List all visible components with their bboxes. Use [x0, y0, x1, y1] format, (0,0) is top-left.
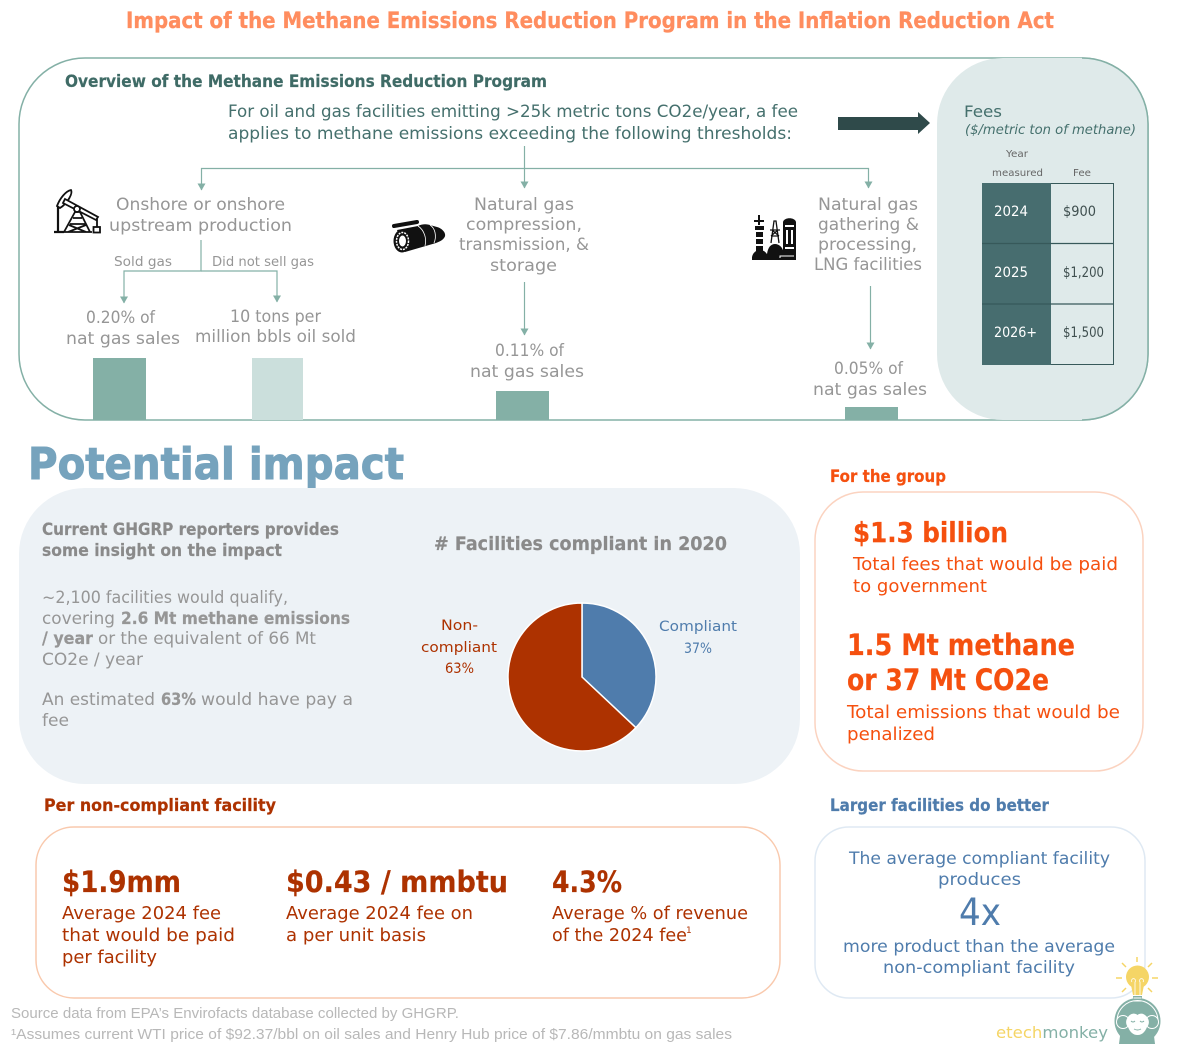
branch: onshore production: Onshore or onshore: [116, 195, 285, 215]
branch: gathering and LNG: Natural gas: [818, 195, 918, 215]
insight body text: covering: [42, 609, 115, 629]
icon: refinery: [752, 215, 796, 260]
fee table: Year: [1005, 149, 1029, 160]
stat: total emissions: 1.5 Mt methane: [847, 628, 1075, 662]
fee table: $1,200: [1063, 265, 1104, 281]
insight heading: some insight on the impact: [42, 541, 282, 560]
overview description: [228, 102, 798, 144]
stat: per unit fee: Average 2024 fee on: [286, 903, 473, 924]
pie label: non-compliant: 63%: [445, 661, 474, 677]
fees heading: Fees: [964, 102, 1002, 121]
branch: gathering and LNG: LNG facilities: [814, 255, 922, 275]
icon: pumpjack: [54, 190, 100, 232]
stat: average fee: Average 2024 fee: [62, 903, 221, 924]
panel: fees: [937, 58, 1148, 420]
pie label: non-compliant: Non-: [441, 618, 478, 634]
flow connectors: [124, 146, 870, 349]
insight body text: 63%: [161, 690, 196, 710]
stat: total emissions: or 37 Mt CO2e: [847, 663, 1049, 697]
branch: onshore production: [66, 195, 356, 349]
fee table: [982, 149, 1114, 365]
insight body text: CO2e / year: [42, 650, 143, 670]
logo: etechmonkey: etechmonkey: [996, 1023, 1108, 1042]
branch: gathering and LNG: nat gas sales: [813, 380, 927, 400]
threshold bars: [93, 358, 898, 420]
fee table: Fee: [1073, 168, 1091, 179]
fee table: 2025: [994, 265, 1028, 281]
larger facilities statement: 4x: [959, 891, 1001, 934]
stat: average fee: $1.9mm: [62, 865, 181, 899]
stat: total fees: [852, 516, 1118, 597]
heading: per non-compliant facility: Per non-compliant facility: [44, 796, 276, 815]
stat: per unit fee: [286, 865, 508, 946]
stat: total emissions: penalized: [847, 724, 935, 745]
overview description: applies to methane emissions exceeding the following thresholds:: [228, 124, 792, 144]
stat: total emissions: Total emissions that would be: [846, 702, 1120, 723]
larger facilities statement: produces: [938, 870, 1021, 890]
insight body text: An estimated: [42, 690, 155, 710]
larger facilities statement: The average compliant facility: [848, 849, 1110, 869]
pie label: compliant: [659, 619, 737, 657]
stat: percent of revenue: [552, 865, 748, 946]
branch: onshore production: nat gas sales: [66, 329, 180, 349]
fee table: measured: [992, 168, 1043, 179]
fee table: $900: [1063, 204, 1096, 220]
insight body text: [42, 588, 353, 731]
insight heading: Current GHGRP reporters provides: [42, 520, 339, 539]
heading: for the group: For the group: [830, 467, 946, 486]
overview heading: Overview of the Methane Emissions Reduction Program: [65, 72, 547, 92]
branch: onshore production: upstream production: [109, 216, 292, 236]
branch: gathering and LNG: processing,: [818, 235, 917, 255]
stat: average fee: per facility: [62, 947, 157, 968]
pie chart heading: # Facilities compliant in 2020: [434, 533, 727, 555]
source note: ¹Assumes current WTI price of $92.37/bbl on oil sales and Henry Hub price of $7.86/mmbtu on gas sales: [11, 1027, 732, 1043]
arrow: to fees: [838, 112, 930, 134]
panel: larger facilities: [815, 827, 1145, 998]
insight body text: / year: [42, 629, 94, 649]
branch: onshore production: Did not sell gas: [212, 255, 314, 270]
insight body text: or the equivalent of 66 Mt: [98, 629, 316, 649]
pie label: compliant: 37%: [684, 641, 712, 657]
stat: percent of revenue: 4.3%: [552, 865, 622, 899]
branch: onshore production: Sold gas: [114, 255, 172, 270]
branch: gathering and LNG: 0.05% of: [834, 359, 904, 379]
fees unit: ($/metric ton of methane): [965, 122, 1136, 138]
icon: pipe: [394, 222, 445, 252]
logo: etechmonkey: [996, 957, 1160, 1044]
stat: average fee: [62, 865, 235, 968]
branch: compression and storage: transmission, &: [459, 235, 589, 255]
larger facilities statement: more product than the average: [843, 937, 1115, 957]
branch: gathering and LNG: [813, 195, 927, 400]
source note: Source data from EPA’s Envirofacts database collected by GHGRP.: [11, 1006, 459, 1022]
stat: total emissions: [846, 628, 1120, 745]
stat: percent of revenue: of the 2024 fee: [552, 925, 687, 946]
branch: onshore production: 0.20% of: [86, 308, 156, 328]
pie chart: [421, 603, 737, 751]
branch: compression and storage: nat gas sales: [470, 362, 584, 382]
stat: per unit fee: $0.43 / mmbtu: [286, 865, 508, 899]
larger facilities statement: [843, 849, 1115, 978]
insight body text: 2.6 Mt methane emissions: [121, 609, 350, 629]
insight heading: [42, 520, 339, 560]
stat: percent of revenue: 1: [686, 926, 692, 936]
larger facilities statement: non-compliant facility: [883, 958, 1075, 978]
title: Impact of the Methane Emissions Reduction Program in the Inflation Reduction Act: [126, 9, 1054, 34]
branch: gathering and LNG: gathering &: [818, 215, 919, 235]
heading: larger facilities: Larger facilities do better: [830, 796, 1050, 815]
stat: total fees: $1.3 billion: [853, 516, 1008, 549]
panel: for the group: [815, 492, 1143, 771]
stat: percent of revenue: Average % of revenue: [552, 903, 748, 924]
branch: compression and storage: [459, 195, 589, 382]
branch: onshore production: 10 tons per: [230, 307, 321, 327]
insight body text: fee: [42, 711, 69, 731]
stat: total fees: to government: [853, 576, 987, 597]
branch: compression and storage: 0.11% of: [495, 341, 565, 361]
stat: average fee: that would be paid: [62, 925, 235, 946]
insight body text: ~2,100 facilities would qualify,: [42, 588, 288, 608]
stat: total fees: Total fees that would be paid: [852, 554, 1118, 575]
panel: per non-compliant facility: [36, 827, 780, 998]
stat: per unit fee: a per unit basis: [286, 925, 426, 946]
branch: compression and storage: storage: [490, 256, 557, 276]
insight body text: would have pay a: [201, 690, 353, 710]
fee table: 2024: [994, 204, 1028, 220]
branch: compression and storage: compression,: [466, 215, 582, 235]
panel: overview: [19, 58, 1148, 420]
pie label: non-compliant: [421, 618, 497, 677]
source note: [11, 1006, 732, 1043]
fee table: $1,500: [1063, 325, 1104, 341]
branch: onshore production: million bbls oil sold: [195, 327, 356, 347]
heading: potential impact: Potential impact: [28, 439, 404, 490]
branch: compression and storage: Natural gas: [474, 195, 574, 215]
fee table: 2026+: [994, 325, 1037, 341]
pie label: compliant: Compliant: [659, 619, 737, 635]
overview description: For oil and gas facilities emitting >25k metric tons CO2e/year, a fee: [228, 102, 798, 122]
panel: GHGRP insight: [19, 488, 800, 784]
pie label: non-compliant: compliant: [421, 640, 497, 656]
